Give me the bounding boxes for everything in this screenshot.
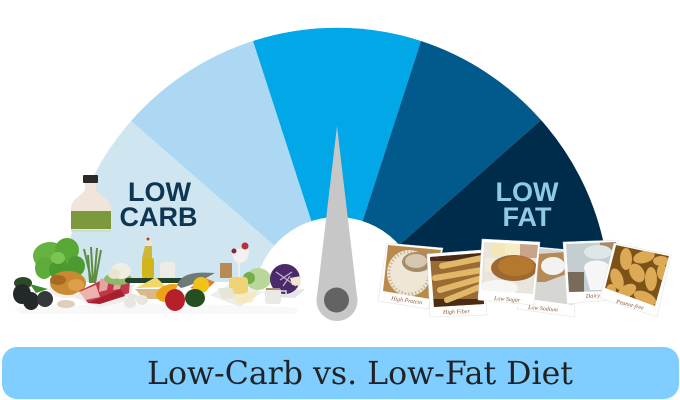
gauge segment: dark navy (337, 120, 603, 300)
heading: low fat: LOW (496, 177, 559, 207)
yellow pepper (156, 284, 178, 302)
photo: high protein: High Protein (390, 296, 423, 306)
table shadow (14, 304, 298, 314)
fish (177, 273, 215, 291)
photo: high fiber (427, 250, 487, 317)
photo: high protein (378, 243, 445, 309)
mushrooms (57, 300, 75, 308)
gauge segment: bright blue (253, 28, 421, 300)
icon: large bottle (71, 175, 111, 232)
needle hub (324, 288, 349, 312)
lettuce (33, 238, 85, 280)
oil bottle (142, 237, 154, 278)
gauge segment: medium navy (337, 41, 541, 300)
heading: low fat (496, 177, 559, 232)
photo: dairy (563, 240, 618, 304)
green cabbage (243, 268, 271, 290)
granola glass (220, 263, 232, 278)
white floor under food and photos (0, 282, 400, 342)
avocados (13, 277, 53, 310)
cauliflower (104, 263, 132, 285)
photo: low sodium (517, 245, 575, 317)
cheese plate (210, 277, 263, 307)
gauge needle (316, 126, 358, 321)
asparagus (84, 247, 101, 283)
heading: low carb: LOW (128, 177, 192, 207)
green pepper (185, 289, 205, 307)
zucchini (125, 278, 183, 283)
heading: low carb: CARB (120, 202, 198, 232)
jar (160, 262, 175, 283)
title text: Low-Carb vs. Low-Fat Diet (147, 356, 573, 392)
gauge (70, 28, 603, 383)
gauge inner white circle (254, 217, 420, 383)
chicken (49, 271, 87, 298)
food spread (13, 237, 305, 314)
photo: dairy: Dairy (585, 293, 600, 300)
photo: high fiber: High Fiber (442, 309, 471, 316)
needle body (316, 126, 358, 321)
meat plate (70, 278, 134, 307)
dessert glass with berries (232, 242, 249, 280)
gauge segment: pale blue (70, 121, 337, 300)
gauge segment: light blue (131, 41, 337, 300)
cup (265, 288, 286, 304)
lemon (193, 277, 209, 293)
photo: peanut-free (600, 243, 671, 317)
heading: low carb (120, 177, 198, 232)
heading: low fat: FAT (502, 202, 552, 232)
photo: peanut-free: Peanut-free (615, 298, 645, 312)
eggs (124, 294, 148, 308)
red cabbage (262, 264, 305, 298)
photo: low sugar (478, 239, 540, 305)
photo: low sodium: Low Sodium (527, 305, 559, 314)
cheese bowl (135, 277, 166, 299)
banner background (2, 347, 679, 399)
title banner (2, 347, 679, 399)
photo: low sugar: Low Sugar (493, 296, 521, 304)
red pepper (165, 289, 185, 311)
